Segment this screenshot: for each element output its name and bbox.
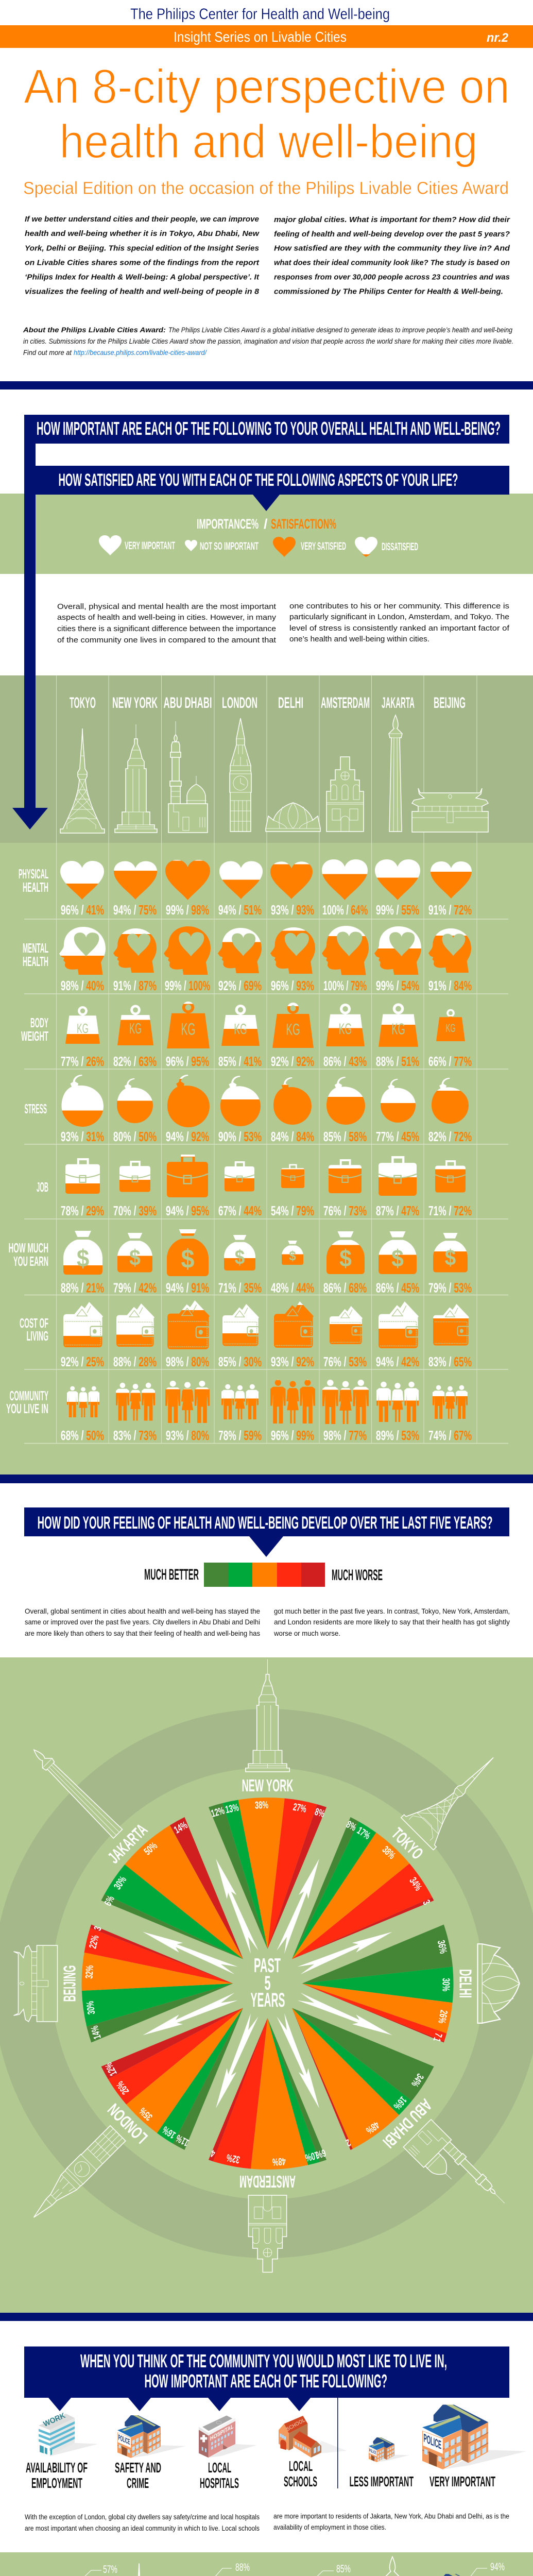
body text: past five years: worse or much worse.	[273, 1629, 340, 1637]
infographic canvas: STRESS	[25, 1101, 47, 1116]
body text: ideal community: are most important when choosing an ideal community in which to live. Local schools	[25, 2524, 260, 2532]
city names: BEIJING	[434, 694, 466, 711]
body text: ideal community: are more important to residents of Jakarta, New York, Abu Dhabi and Delhi, as is the	[273, 2512, 509, 2520]
legend title: /	[264, 516, 268, 532]
wedge: Delhi	[302, 1925, 520, 2043]
wedge: New York	[209, 1659, 326, 1949]
skyline dark strip	[0, 675, 533, 843]
row: physical health: 93% / 93%	[271, 903, 314, 918]
row: cost of living	[61, 1300, 472, 1369]
body text: importance vs satisfaction	[57, 602, 510, 645]
row labels	[6, 866, 48, 1416]
row: job: 67% / 44%	[218, 1204, 262, 1218]
wedge: London: 35%	[137, 2105, 154, 2123]
icon: Amsterdam canal house	[326, 757, 364, 832]
row: how much you earn: 86% / 45%	[376, 1280, 419, 1296]
row: mental health: 96% / 93%	[271, 978, 314, 993]
local hospitals label	[200, 2460, 239, 2491]
body text: ideal community: With the exception of London, global city dwellers say safety/crime and local hospitals	[25, 2513, 260, 2521]
intro text: responses from over 30,000 people across 23 countries and was	[274, 273, 510, 281]
row: mental health: 99% / 100%	[165, 978, 210, 993]
navy divider	[0, 1475, 533, 1483]
row: how much you earn: 86% / 68%	[323, 1280, 367, 1296]
wedge: London: 26%	[114, 2079, 131, 2097]
icon: large police, very important	[422, 2405, 526, 2469]
row: community you live in: 68% / 50%	[61, 1428, 104, 1443]
panel: wheel background	[0, 1657, 533, 2313]
wedge: Abu Dhabi: 48%	[364, 2119, 382, 2137]
wedge: Amsterdam: 32%	[226, 2151, 241, 2166]
row: job: 54% / 79%	[271, 1204, 314, 1218]
row: body weight: 85% / 41%	[218, 1054, 262, 1069]
row: body weight: KG	[391, 1021, 405, 1038]
icon: small police, less important	[369, 2437, 409, 2462]
colour scale legend: MUCH BETTER	[144, 1566, 199, 1583]
colour scale legend	[144, 1563, 383, 1587]
row: job: 78% / 29%	[61, 1204, 104, 1218]
community question header	[24, 2346, 509, 2411]
legend divider	[337, 2398, 338, 2488]
row: how much you earn: $	[181, 1244, 195, 1274]
wedge: London	[0, 1966, 285, 2259]
row: body weight: 92% / 92%	[271, 1054, 314, 1069]
wedge: New York: 13%	[224, 1802, 239, 1816]
infographic canvas: COMMUNITY	[9, 1388, 48, 1403]
about the award: About the Philips Livable Cities Award:	[23, 326, 166, 334]
row: body weight: KG	[234, 1021, 247, 1037]
icon: Tokyo tower	[60, 728, 105, 833]
row: body weight: KG	[445, 1022, 456, 1035]
city names: NEW YORK	[112, 694, 158, 711]
row: body weight: 86% / 43%	[323, 1054, 367, 1069]
city names: TOKYO	[70, 694, 96, 711]
city names	[70, 694, 466, 711]
row: job	[61, 1155, 472, 1218]
body text: importance vs satisfaction: one contributes to his or her community. This difference is	[289, 602, 509, 611]
wedge: Tokyo: 38%	[380, 1844, 398, 1861]
body text: importance vs satisfaction: aspects of health and well-being in cities. However, in many	[57, 613, 277, 622]
body text: past five years: same or improved over the past five years. City dwellers in Abu Dhabi and Delhi	[25, 1618, 260, 1626]
panel: community background	[0, 2552, 533, 2576]
row: job: 76% / 73%	[323, 1204, 367, 1218]
title: health and well-being	[60, 115, 478, 168]
size legend labels: LESS IMPORTANT	[349, 2473, 414, 2489]
row: job: 71% / 72%	[428, 1204, 472, 1218]
row: stress: 85% / 58%	[323, 1129, 367, 1144]
row: cost of living: 88% / 28%	[113, 1354, 157, 1369]
row: stress: 82% / 72%	[428, 1129, 472, 1144]
body text: importance vs satisfaction: cities there is a significant difference between the importance	[57, 624, 276, 633]
wedge: New York: 12%	[210, 1805, 226, 1820]
icon: police	[117, 2415, 186, 2458]
wedge: Abu Dhabi: ABU DHABI	[380, 2095, 436, 2152]
intro text: If we better understand cities and their people, we can improve	[25, 215, 259, 224]
panel: Tokyo	[55, 2562, 267, 2576]
center name: The Philips Center for Health and Well-being	[130, 6, 390, 23]
subtitle: Special Edition on the occasion of the Philips Livable Cities Award	[23, 178, 509, 198]
centre label: 5	[265, 1972, 271, 1994]
safety and crime label: CRIME	[127, 2475, 149, 2491]
row: how much you earn: 79% / 42%	[113, 1280, 157, 1296]
intro text: what does their ideal community look like? The study is based on	[274, 259, 510, 267]
panel: Tokyo: 57%	[103, 2564, 117, 2575]
row: community you live in: 89% / 53%	[376, 1428, 419, 1443]
wedge: Amsterdam: 6%	[315, 2147, 327, 2161]
intro text: ‘Philips Index for Health & Well-being: A global perspective’. It	[25, 273, 260, 281]
body text: past five years	[25, 1607, 510, 1637]
wedge: Tokyo: 3	[420, 1898, 433, 1907]
infographic canvas: HEALTH	[23, 879, 48, 895]
row: cost of living: 83% / 65%	[428, 1354, 472, 1369]
row: body weight	[61, 1002, 472, 1069]
row: mental health	[59, 926, 472, 993]
legend title: SATISFACTION%	[271, 516, 336, 532]
wedge: Abu Dhabi: 34%	[409, 2072, 426, 2089]
wedge: Jakarta	[0, 1708, 285, 2002]
row: body weight: 96% / 95%	[166, 1054, 209, 1069]
safety and crime label: SAFETY AND	[115, 2460, 161, 2476]
wedge: Jakarta: JAKARTA	[104, 1820, 151, 1867]
row: how much you earn: $	[445, 1245, 456, 1270]
icon: Big Ben	[230, 718, 251, 832]
about the award	[23, 326, 513, 357]
legend band	[0, 494, 533, 574]
wedge: Jakarta: 6%	[102, 1894, 117, 1908]
column dividers and row rules	[24, 675, 508, 1444]
wedge: Delhi: 26%	[436, 2009, 450, 2024]
icon: dissatisfied heart	[355, 537, 377, 557]
wedge: Amsterdam: AMSTERDAM	[239, 2172, 296, 2191]
row: job: 70% / 39%	[113, 1204, 157, 1218]
panel: Jakarta: 85%	[336, 2563, 351, 2575]
infographic canvas: MENTAL	[23, 940, 48, 956]
icon: Lotus temple	[266, 803, 320, 832]
row: stress: 77% / 45%	[376, 1129, 419, 1144]
row: how much you earn: $	[235, 1246, 245, 1268]
wedge: Delhi: 36%	[435, 1939, 449, 1955]
masthead	[0, 6, 533, 48]
panel: Jakarta	[285, 2557, 524, 2576]
row: mental health: 98% / 40%	[61, 978, 104, 993]
radial chart: past five years	[0, 1659, 533, 2272]
intro text: major global cities. What is important for them? How did their	[274, 215, 510, 224]
row: physical health: 94% / 75%	[113, 903, 157, 918]
intro text	[25, 215, 510, 296]
navy divider	[0, 2313, 533, 2321]
infographic canvas: PHYSICAL	[19, 866, 48, 882]
infographic canvas: YOU EARN	[13, 1253, 48, 1269]
row: body weight: 66% / 77%	[428, 1054, 472, 1069]
body text: importance vs satisfaction: one’s health and well-being within cities.	[289, 635, 429, 643]
wedge: London: LONDON	[104, 2100, 151, 2147]
icon: not so important heart	[185, 540, 197, 551]
intro text: health and well-being whether it is in Tokyo, Abu Dhabi, New	[25, 229, 260, 238]
wedge: London: 16%	[160, 2124, 178, 2141]
row labels: YOU LIVE IN	[6, 1401, 48, 1416]
five year question header	[24, 1507, 509, 1557]
infographic canvas: BODY	[30, 1015, 48, 1030]
importance question	[24, 415, 509, 444]
row: community you live in	[61, 1380, 472, 1443]
row: community you live in: 74% / 67%	[428, 1428, 472, 1443]
row: cost of living: 93% / 92%	[271, 1354, 314, 1369]
title	[24, 59, 510, 168]
body text: importance vs satisfaction: of the community one lives in compared to the amount that	[57, 636, 277, 645]
wedge: Delhi: 7	[432, 2031, 444, 2039]
orange series bar: nr.2	[487, 31, 509, 45]
availability of employment label	[26, 2460, 88, 2491]
row: physical health	[60, 859, 472, 918]
icon: school	[279, 2416, 347, 2458]
row: mental health: 91% / 87%	[113, 978, 157, 993]
wedge: Beijing: BEIJING	[60, 1965, 79, 2002]
body text: past five years: Overall, global sentiment in cities about health and well-being has stayed the	[25, 1607, 260, 1615]
row: community you live in: 83% / 73%	[113, 1428, 157, 1443]
community legend	[26, 2405, 526, 2491]
wedge: Jakarta: 30%	[112, 1874, 129, 1892]
row: mental health: 92% / 69%	[218, 978, 262, 993]
about the award: http://because.philips.com/livable-cities-award/	[74, 348, 208, 357]
row: community you live in: 96% / 99%	[271, 1428, 314, 1443]
local hospitals label: LOCAL	[208, 2460, 231, 2476]
city names: ABU DHABI	[164, 694, 212, 711]
wedge: Delhi: 1	[431, 2036, 443, 2043]
row: body weight: KG	[339, 1021, 352, 1038]
intro text: feeling of health and well-being develop over the past 5 years?	[274, 230, 510, 239]
intro text: How satisfied are they with the community they live in? And	[274, 244, 510, 252]
icon: hospital	[199, 2414, 256, 2458]
availability of employment label: EMPLOYMENT	[31, 2475, 82, 2491]
body text: past five years: are more likely than others to say that their feeling of health and well-being has	[25, 1629, 260, 1637]
row: how much you earn: $	[129, 1245, 141, 1270]
wedge: Jakarta: 50%	[142, 1840, 160, 1857]
centre label	[250, 1955, 285, 2011]
radial chart: past five years: YEARS	[250, 1989, 285, 2011]
row: stress: 84% / 84%	[271, 1129, 314, 1144]
wedge: Beijing: 22%	[87, 1934, 101, 1950]
wedge: New York: 8%	[314, 1806, 326, 1820]
row: physical health: 99% / 98%	[166, 903, 209, 918]
wedge: Beijing: 30%	[84, 2001, 97, 2015]
wedge: Beijing	[13, 1925, 233, 2042]
wedge: Amsterdam: 48%	[272, 2156, 286, 2168]
row: community you live in: 78% / 59%	[218, 1428, 262, 1443]
intro text: York, Delhi or Beijing. This special edition of the Insight Series	[25, 244, 259, 252]
wedge: London: 11%	[174, 2132, 191, 2148]
wedge: Abu Dhabi	[250, 1966, 533, 2254]
icon: very satisfied heart	[273, 537, 296, 557]
local schools label	[284, 2458, 317, 2489]
row: stress: 94% / 92%	[166, 1129, 209, 1144]
row: how much you earn: 94% / 91%	[166, 1280, 209, 1296]
city names: DELHI	[278, 694, 303, 711]
row labels: WEIGHT	[21, 1028, 48, 1044]
panel: Jakarta: 94%	[490, 2561, 505, 2573]
wedge: Abu Dhabi: 2	[344, 2137, 352, 2149]
city names: JAKARTA	[382, 694, 415, 711]
icon: very important heart	[99, 535, 122, 555]
not so important label: NOT SO IMPORTANT	[200, 540, 259, 552]
title: An 8-city perspective on	[24, 59, 510, 113]
row: stress: 90% / 53%	[218, 1129, 262, 1144]
wedge: Beijing: 3	[92, 1925, 104, 1932]
row: cost of living: 76% / 53%	[323, 1354, 367, 1369]
navy divider	[0, 381, 533, 389]
row: body weight: KG	[77, 1021, 89, 1036]
row: mental health: 100% / 79%	[323, 978, 367, 993]
wedge: Jakarta: 14%	[172, 1819, 190, 1836]
satisfaction question	[36, 466, 509, 511]
wedge: Amsterdam: 10%	[304, 2149, 320, 2164]
row: stress: 93% / 31%	[61, 1129, 104, 1144]
infographic canvas: JOB	[37, 1179, 48, 1195]
icon: Chrysler building	[115, 724, 157, 833]
question headers	[12, 415, 509, 829]
navy arrow connector	[12, 415, 48, 829]
body text: importance vs satisfaction: level of stress is consistently ranked an important factor of	[289, 624, 510, 633]
row: how much you earn: 88% / 21%	[61, 1280, 104, 1296]
body text: importance vs satisfaction: Overall, physical and mental health are the most important	[57, 602, 277, 611]
row: physical health: 96% / 41%	[61, 903, 104, 918]
row labels: HOW MUCH	[8, 1240, 48, 1256]
wedge: Delhi: 30%	[440, 1978, 452, 1991]
infographic canvas: DISSATISFIED	[382, 541, 418, 553]
row: how much you earn: 48% / 44%	[271, 1280, 314, 1296]
centre label: PAST	[254, 1955, 281, 1977]
city names: AMSTERDAM	[321, 694, 370, 711]
row: physical health: 94% / 51%	[218, 903, 262, 918]
row: body weight: 88% / 51%	[376, 1054, 419, 1069]
wedge: London: 12%	[102, 2061, 119, 2078]
wedge: Abu Dhabi: 16%	[391, 2094, 409, 2112]
about the award: Find out more at	[23, 348, 72, 357]
row: physical health: 99% / 55%	[376, 903, 419, 918]
row: job: 87% / 47%	[376, 1204, 419, 1218]
row: mental health: 99% / 54%	[376, 978, 419, 993]
row: how much you earn: $	[289, 1248, 296, 1264]
infographic canvas: COST OF	[20, 1315, 48, 1331]
wedge: Tokyo: 34%	[407, 1875, 424, 1893]
panel: Tokyo: 88%	[235, 2562, 250, 2573]
row: community you live in: 98% / 77%	[323, 1428, 367, 1443]
wedge: New York: 27%	[292, 1801, 307, 1815]
row: how much you earn: 71% / 35%	[218, 1280, 262, 1296]
orange series bar	[0, 25, 533, 48]
local schools label: LOCAL	[289, 2458, 313, 2474]
wedge: Tokyo	[250, 1716, 533, 2001]
very satisfied label: VERY SATISFIED	[301, 540, 346, 552]
city names: LONDON	[222, 694, 257, 711]
safety and crime label	[115, 2460, 161, 2491]
row: stress	[61, 1075, 472, 1144]
infographic canvas: MUCH WORSE	[332, 1567, 383, 1584]
intro text: visualizes the feeling of health and well-being of people in 8	[25, 287, 260, 296]
wedge: New York: NEW YORK	[242, 1776, 294, 1795]
icon: work	[39, 2412, 98, 2456]
row: how much you earn: $	[339, 1245, 352, 1272]
row: how much you earn: $	[77, 1244, 89, 1272]
row: how much you earn	[61, 1229, 472, 1296]
body text: ideal community: availability of employment in those cities.	[273, 2523, 386, 2531]
icon: Tiananmen gate	[412, 788, 488, 832]
legend title: IMPORTANCE%	[197, 516, 259, 532]
skyline band	[0, 675, 533, 1475]
intro text: commissioned by The Philips Center for Health & Well-being.	[274, 287, 503, 296]
wedge: Tokyo: 8%	[345, 1819, 358, 1833]
wedge: Tokyo: TOKYO	[388, 1824, 427, 1863]
intro text: on Livable Cities shares some of the findings from the report	[25, 259, 260, 267]
body text: past five years: got much better in the past five years. In contrast, Tokyo, New York, Amsterdam,	[274, 1607, 510, 1615]
body text: importance vs satisfaction: particularly significant in London, Amsterdam, and Tokyo. The	[289, 613, 509, 621]
wedge: Beijing: 14%	[89, 2024, 104, 2041]
wedge: Tokyo: 17%	[355, 1825, 372, 1842]
row: mental health: 91% / 84%	[428, 978, 472, 993]
row: how much you earn: $	[391, 1245, 404, 1272]
row: physical health: 100% / 64%	[322, 902, 368, 918]
row: body weight: KG	[129, 1021, 142, 1037]
row: cost of living: 98% / 80%	[166, 1354, 209, 1369]
wedge: Amsterdam: 4	[209, 2147, 216, 2160]
row: cost of living: 92% / 25%	[61, 1354, 104, 1369]
row: body weight: KG	[181, 1020, 196, 1039]
row: job: 94% / 95%	[166, 1204, 209, 1218]
wedge: Delhi: DELHI	[456, 1969, 475, 1998]
row: community you live in: 93% / 80%	[166, 1428, 209, 1443]
skyline landmarks	[60, 715, 488, 833]
row: body weight: 77% / 26%	[61, 1054, 104, 1069]
row: cost of living: 94% / 42%	[376, 1354, 419, 1369]
wedge: New York: 38%	[255, 1799, 268, 1811]
orange series bar: Insight Series on Livable Cities	[174, 29, 347, 45]
row: cost of living: 85% / 30%	[218, 1354, 262, 1369]
wedge: Beijing: 32%	[83, 1965, 96, 1979]
row: how much you earn: 79% / 53%	[428, 1280, 472, 1296]
row: body weight: 82% / 63%	[113, 1054, 157, 1069]
row: body weight: KG	[286, 1021, 300, 1039]
infographic canvas: HEALTH	[23, 954, 48, 969]
body text: past five years: and London residents are more likely to say that their health has got slightly	[274, 1618, 510, 1626]
availability of employment label: AVAILABILITY OF	[26, 2460, 88, 2476]
icon: Abu Dhabi mosque	[168, 721, 208, 833]
very important label: VERY IMPORTANT	[125, 540, 175, 552]
body text: ideal community	[25, 2512, 509, 2532]
row: stress: 80% / 50%	[113, 1129, 157, 1144]
row: physical health: 91% / 72%	[428, 903, 472, 918]
centre arrows	[141, 1857, 394, 2110]
community legend: SCHOOLS	[284, 2473, 317, 2489]
icon: Monas monument	[389, 715, 402, 832]
wedge: Amsterdam	[209, 2018, 327, 2272]
legend	[99, 516, 418, 557]
infographic canvas: LIVING	[27, 1328, 48, 1344]
community legend: HOSPITALS	[200, 2475, 239, 2491]
